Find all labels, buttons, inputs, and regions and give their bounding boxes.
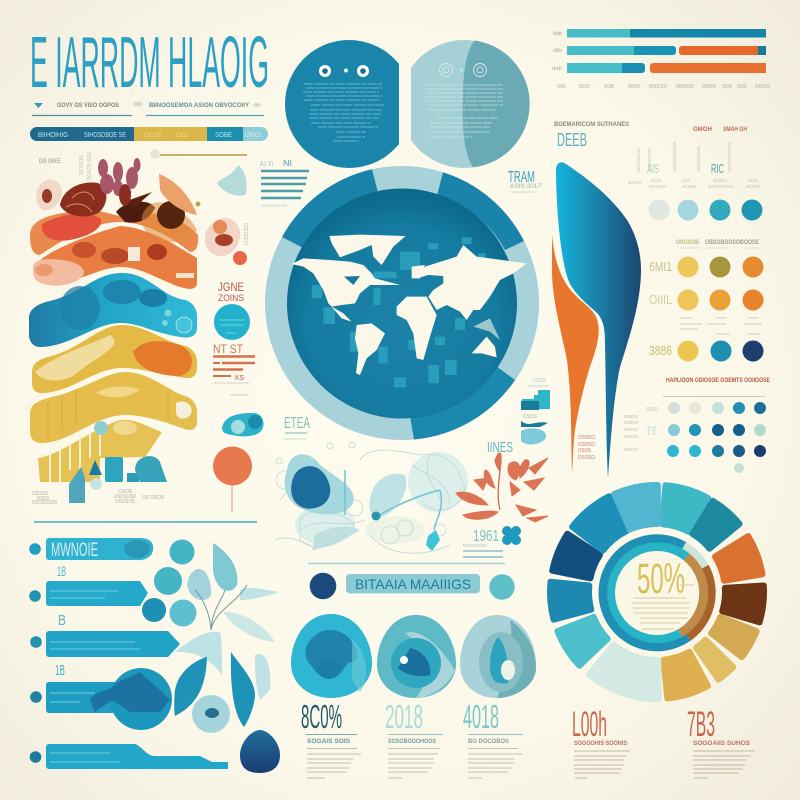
step dot 4: [30, 691, 42, 703]
ring: light base: [265, 166, 539, 440]
egg 3: [460, 615, 536, 698]
segmented header bar: OSSE: [144, 132, 162, 139]
subheading row: GOVY OS VISO OOPOS: [57, 103, 119, 109]
dot grid labels: [624, 407, 658, 452]
Islands: [473, 318, 500, 340]
food illustrations: [36, 158, 247, 265]
blue leaf shape: [556, 162, 641, 478]
row 2: dib: [553, 48, 562, 54]
wedge 8: [589, 644, 659, 699]
bar list beside food: [260, 159, 309, 208]
infographic canvas: E IARRDM HLAOIG: [30, 23, 269, 103]
small captions below stack: [32, 489, 165, 506]
segmented header bar: OHO: [245, 132, 261, 139]
teal circle: [489, 574, 515, 600]
row 1: [553, 29, 766, 38]
world map: [292, 235, 527, 387]
pale fill clusters: [295, 452, 468, 545]
egg 2: [377, 615, 456, 698]
label: year with blue flower: [463, 526, 521, 557]
donut centre value: 50%: [637, 555, 685, 603]
Hudson Bay: [344, 276, 360, 285]
row numerals: [647, 161, 724, 176]
icon: brown shapes: [116, 184, 197, 242]
top right bar chart: [552, 29, 770, 90]
small vertical labels above sprigs: OSOSO: [244, 223, 250, 245]
row 3: dab: [552, 66, 562, 72]
dark leaf right: [231, 652, 255, 727]
ring: upper left segment: [282, 169, 378, 248]
icon: teal leaf: [217, 165, 247, 196]
dot matrix captions: OS: [682, 178, 690, 183]
row 1: dab: [553, 31, 562, 37]
step dot 2: [29, 590, 41, 602]
dot grid heading: HAPLIOON ODIOSOE GOEMTS OOIIOOSE: [666, 378, 770, 384]
small dot grid: [667, 402, 766, 473]
dot row 2: 6MI1: [649, 259, 672, 274]
light text circle: [400, 40, 530, 168]
navy egg: [240, 730, 280, 773]
icon: gold dot: [196, 202, 200, 206]
row numerals: AIS: [647, 161, 659, 176]
small left label: DIS GREE: [39, 159, 61, 165]
bottom left rule: [34, 521, 257, 523]
pale teal wash: [285, 454, 354, 514]
red leaf labels: [578, 435, 595, 461]
teal text circle: [214, 304, 250, 340]
section heading: DEEB: [557, 130, 587, 150]
band: yellow: [32, 325, 197, 393]
label: IINES: IINES: [487, 439, 513, 456]
wedge 4: [722, 586, 764, 622]
icon: coral tree: [213, 446, 252, 512]
label: red stacked heading: [218, 280, 244, 303]
icon: teal blob: [222, 413, 264, 436]
dot captions: [680, 318, 762, 334]
label: TRAM: ASIS 2017: [510, 184, 542, 190]
vertical tick labels: [636, 142, 732, 172]
dot matrix captions: SOSOSOS: [708, 184, 733, 189]
vertical tick labels: SOSOS: [647, 148, 652, 172]
teal dot: [372, 512, 380, 520]
segmented header bar: BIIHOIHIG: [38, 132, 68, 139]
row 3: [552, 63, 766, 73]
donut centre text: [632, 585, 694, 629]
stat column 2: [385, 698, 443, 778]
stat column 1: 8C0%: [301, 698, 342, 735]
plant stems: [195, 585, 247, 630]
dot grid heading: [663, 378, 770, 396]
red bar list: [213, 342, 255, 395]
botanical illustration: [275, 442, 468, 553]
icon: dot: [344, 68, 348, 72]
small captions below stack: OS OSOS: [142, 495, 165, 501]
icon: coral dot: [233, 251, 247, 265]
icon: small pink blob with sprig: [36, 180, 62, 210]
dot grid labels: T6: [646, 424, 657, 438]
step bar 1: [46, 538, 153, 561]
stat: right orange: 7B3: [687, 705, 715, 744]
mini chart right of globe: OSOS: [532, 378, 547, 384]
label: B: B: [58, 612, 66, 629]
mini chart right of globe: [521, 378, 550, 444]
segmented header bar: OS: [176, 132, 188, 139]
wedge 7: [664, 652, 708, 698]
label: red stacked heading: ZOINS: [218, 293, 244, 303]
wedge 12: [572, 496, 627, 551]
blue text circle: [285, 40, 399, 168]
subheading row: [32, 102, 264, 116]
step bar 1: MWNOIE: [51, 540, 98, 561]
axis labels: 000010: [649, 84, 667, 90]
stat column 1: SOGAIS SOIS: [307, 738, 351, 745]
axis labels: 5000: [628, 84, 640, 90]
band: top orange: [30, 210, 198, 255]
icon: purple sprigs: [98, 158, 140, 198]
axis labels: 008: [604, 84, 614, 90]
slider: [150, 149, 247, 159]
dot matrix captions: SOS: [651, 178, 661, 183]
donut chart: [550, 485, 764, 699]
step dot 1: [29, 543, 41, 555]
yellow section heading: [676, 240, 759, 248]
vertical tick labels: SOSOS: [636, 148, 641, 172]
small captions below stack: OSOSO: [32, 491, 48, 497]
yellow section heading: OBSOBOOSOBOOSE: [705, 240, 759, 246]
band: blue: [29, 273, 197, 347]
red leaf labels: OSOSO: [578, 455, 595, 461]
yellow section heading: OROSOB: [676, 240, 700, 246]
label: year with blue flower: 1961: [473, 528, 499, 545]
landmass: Eurasia: [417, 245, 527, 320]
label: ETEA: ETEA: [284, 415, 310, 432]
pale leaf stem: [345, 470, 441, 530]
vertical tick labels: SOSOS: [696, 146, 701, 172]
landmass: Africa: [397, 297, 437, 360]
inner ring: [603, 539, 711, 647]
icon: faint rings: [440, 64, 486, 76]
small vertical labels above sprigs: [79, 151, 250, 245]
wedge 13: [614, 485, 658, 530]
circle body text: [425, 85, 504, 137]
row numerals: RIC: [711, 161, 724, 176]
subheading row: BIINOOSEMOA ASION OBVOCOIIY: [149, 103, 249, 109]
stat column 1: [301, 698, 361, 778]
segmented header bar: SIHOSOBOE SE: [84, 132, 126, 139]
cyan flower: [426, 530, 440, 551]
wedge 5: [711, 617, 757, 657]
dot matrix captions: SOSO: [746, 184, 761, 189]
axis labels: 006: [722, 84, 732, 90]
wedge 2: [692, 501, 740, 549]
stat column 2: SOSOBOGOHOOS: [388, 738, 437, 745]
wedge 11: [552, 534, 600, 578]
dot matrix captions: SOSO: [682, 184, 697, 189]
vertical tick labels: SOSOSOS: [727, 142, 732, 172]
dot grid labels: SOSOS: [624, 447, 638, 452]
mini chart right of globe: DSOS: [523, 414, 538, 420]
teal circles by step list: [142, 540, 196, 626]
top right red labels: SMAH GH: [723, 127, 747, 133]
small captions below stack: OSOSOS: [115, 499, 136, 505]
lower wash: [312, 527, 360, 550]
segmented header bar: SOBE: [215, 132, 232, 139]
red bar list: NT ST: [213, 342, 244, 356]
step dot 5: [30, 751, 41, 763]
step bar 5: [46, 744, 228, 769]
label: TRAM: TRAM: [508, 169, 535, 186]
bar list beside food: NI: [283, 159, 292, 168]
food wave stack: [29, 210, 198, 503]
icons: small shapes at base of stack: [69, 456, 167, 503]
dot grid labels: SOSOS: [624, 414, 638, 419]
ring: upper right segment: [437, 172, 524, 250]
step list: [29, 538, 228, 769]
dot row 4: [649, 340, 764, 362]
dot grid labels: SOSOS: [624, 427, 638, 432]
dot matrix captions: SOS: [748, 178, 758, 183]
landmass: Greenland: [329, 235, 406, 265]
band: striped yellow: [38, 420, 162, 482]
dark blue blob: [291, 466, 330, 509]
dot grid labels: SOSO: [646, 407, 658, 413]
medallion: [192, 695, 230, 733]
red leaf labels: OSOS: [578, 448, 592, 454]
icon: orange leaf: [159, 174, 197, 215]
label: TRAM: [508, 169, 542, 192]
axis labels: 8010: [579, 84, 590, 90]
axis labels: [557, 84, 770, 90]
pale leaves: [175, 543, 279, 700]
dot row 2: [649, 256, 764, 278]
world globe: [265, 166, 539, 440]
egg 1: [291, 614, 372, 698]
dot row 3: OIIIL: [649, 292, 672, 307]
top right red labels: GMGH: [693, 127, 712, 133]
axis labels: 000000: [676, 84, 694, 90]
section heading: BOEMARICOM SUTHANES: [554, 122, 629, 128]
dot row 3: [649, 290, 764, 310]
label: year with blue flower: OSOSOS: [463, 543, 487, 548]
dot row 1: [648, 200, 762, 220]
navy circle: [310, 573, 336, 599]
small captions below stack: OSOSOSOS: [32, 500, 58, 506]
stat: left orange: SOGOOHIS SOOHIS: [574, 740, 628, 747]
stat: left orange: L00h: [572, 705, 607, 744]
red leaf labels: OSOSO: [578, 435, 595, 441]
landmass: North America: [292, 258, 400, 307]
dot row 4: 3886: [649, 343, 672, 358]
landmass: South America: [355, 323, 385, 375]
stat: right orange: SOGOAIIS SUHOS: [693, 740, 751, 747]
map data tiles: [312, 237, 486, 387]
segmented header bar: [30, 127, 268, 141]
ring: lower right segment: [410, 366, 515, 440]
step bar 4 with circle: [46, 668, 172, 730]
wedge 6: [696, 640, 733, 680]
axis labels: 0000: [702, 84, 716, 90]
wedge 9: [557, 617, 608, 666]
landmass: Europe: [412, 265, 425, 278]
dot matrix captions: SOSOS: [649, 184, 666, 189]
dot matrix captions: SOSO: [628, 180, 643, 185]
section heading: [554, 122, 629, 150]
vertical tick labels: SOSOSOS: [672, 142, 677, 172]
step dot 3: [30, 636, 42, 648]
icon: blue flower: [502, 526, 521, 545]
small captions below stack: OSOS: [118, 489, 133, 495]
stat column 3: BO DOCOBOS: [468, 738, 510, 745]
donut centre disc: [615, 551, 699, 635]
pale line swirls: [275, 442, 465, 553]
icon: pink food blob: [205, 218, 240, 256]
small vertical labels above sprigs: SOSOS SOS: [87, 151, 93, 180]
small captions below stack: OSOSOSO: [114, 494, 136, 500]
plant illustration: [174, 543, 280, 773]
wedge 10: [550, 582, 591, 620]
axis labels: 0000: [755, 84, 770, 90]
band: yellow lower: [30, 372, 197, 443]
wedge 1: [662, 485, 708, 532]
axis labels: 606: [557, 84, 566, 90]
label: 1B lower: 1B: [55, 662, 65, 679]
stat column 2: 2018: [385, 698, 423, 735]
dot grid labels: SOSOS: [624, 434, 638, 439]
dot matrix captions: [628, 178, 761, 189]
stat column 3: [463, 698, 523, 778]
landmass: Central America: [332, 307, 352, 322]
row 2: [553, 46, 766, 55]
coral sprig: [456, 453, 548, 522]
small captions below stack: OSOS: [37, 496, 50, 502]
step bar 3: [46, 631, 180, 657]
orange leaf shape: [552, 235, 599, 474]
label: ETEA: [284, 415, 310, 439]
red bar list: KS: [235, 375, 244, 382]
label: 1B: 1B: [57, 563, 66, 579]
pale leaf: [369, 474, 406, 518]
bottom centre rule: [308, 562, 505, 564]
stat column 3: 4018: [463, 698, 499, 735]
icon: right eye ring: [357, 65, 369, 77]
banner: BITAAIA MAAIIIGS: [355, 576, 471, 592]
red leaf labels: OSOSO: [578, 442, 595, 448]
dark leaf left: [174, 657, 207, 716]
bar list beside food: AJ VI: [260, 161, 273, 168]
top right red labels: [693, 127, 747, 133]
dot matrix captions: SOSO: [713, 178, 728, 183]
small vertical labels above sprigs: SOSOS: [79, 154, 85, 175]
icon: red meat: [60, 182, 106, 216]
ocean disc: [287, 188, 517, 418]
stat: right orange: [687, 705, 755, 778]
wedge 3: [715, 536, 762, 581]
circle body text: [303, 84, 385, 141]
band: orange: [33, 226, 197, 289]
stat: left orange: [572, 705, 630, 778]
icon: left eye ring: [319, 65, 331, 77]
bar list beside food: OSOSOSOS: [261, 203, 287, 208]
step bar 2: [46, 581, 148, 606]
landmass: Australia: [472, 337, 497, 357]
label: red stacked heading: JGNE: [218, 280, 244, 294]
dot grid labels: SOSOS: [624, 420, 638, 425]
axis labels: 000: [737, 84, 747, 90]
